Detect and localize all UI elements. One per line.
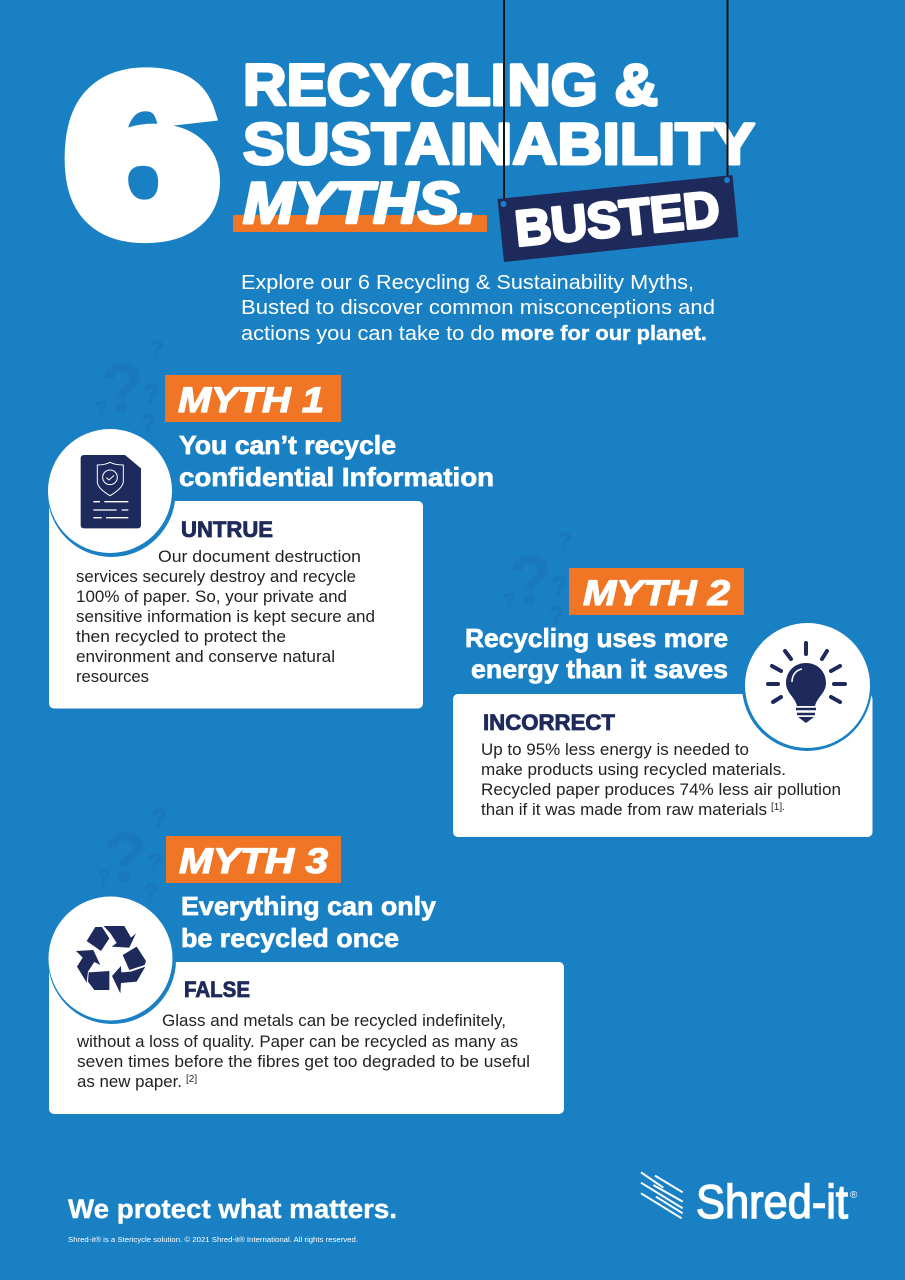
intro text <box>241 271 715 345</box>
question marks: myth 3: ? <box>147 849 162 877</box>
myth 1 heading: You can’t recycle <box>179 430 396 460</box>
myth 2 label <box>569 568 744 615</box>
question marks: myth 3: ? <box>104 818 147 896</box>
question marks: myth 1: ? <box>149 336 164 364</box>
myth 2 body text: [1]. <box>771 802 785 813</box>
big number six: 6 <box>67 33 218 278</box>
tagline: We protect what matters. <box>68 1194 397 1224</box>
myth 2 body text: make products using recycled materials. <box>481 761 786 779</box>
myth 2 body text: Recycled paper produces 74% less air pollution <box>481 781 841 799</box>
myth 2 verdict: INCORRECT <box>483 710 616 735</box>
question marks: myth 1: ? <box>101 349 144 427</box>
myth 3 card <box>49 962 564 1114</box>
myth 2 body text <box>481 741 841 819</box>
question marks: myth 3: ? <box>144 879 159 907</box>
intro text: actions you can take to do more for our planet. <box>241 322 707 345</box>
myth 1 verdict: UNTRUE <box>181 517 273 542</box>
question marks: myth 2: ? <box>549 602 564 630</box>
question marks: myth 2: ? <box>557 528 572 556</box>
panel: myth 2 <box>453 568 872 837</box>
myth 2 heading: energy than it saves <box>471 654 728 684</box>
myth 3 heading <box>181 891 437 953</box>
myth 3 label <box>166 836 341 883</box>
question marks: myth 1 <box>95 336 164 438</box>
myth 1 body text: 100% of paper. So, your private and <box>76 588 347 606</box>
title: SUSTAINABILITY <box>243 112 755 177</box>
question marks: myth 2: ? <box>552 572 567 600</box>
question marks: myth 3 <box>98 805 167 907</box>
myth 1 heading: confidential Information <box>179 462 494 492</box>
intro text: Busted to discover common misconceptions and <box>241 296 715 319</box>
myth 2 body text: Up to 95% less energy is needed to <box>481 741 749 759</box>
icon: light bulb <box>742 621 872 751</box>
myth 3 body text: as new paper. <box>77 1073 182 1091</box>
myth 1 label: MYTH 1 <box>178 381 324 420</box>
myth 3 heading: be recycled once <box>181 923 399 953</box>
myth 3 body text: Glass and metals can be recycled indefinitely, <box>162 1012 506 1030</box>
myth 2 card <box>453 694 872 837</box>
question marks: myth 3: ? <box>98 867 110 889</box>
busted hanging sign <box>498 0 738 262</box>
myth 1 body text: resources <box>76 668 149 686</box>
panel: myth 3 <box>48 836 564 1114</box>
title: RECYCLING & <box>243 53 658 118</box>
title: MYTHS. <box>243 171 476 236</box>
copyright: Shred-it® is a Stericycle solution. © 2021 Shred-it® International. All rights reserved. <box>68 1236 358 1244</box>
question marks: myth 1: ? <box>144 380 159 408</box>
myth 3 body text: without a loss of quality. Paper can be recycled as many as <box>76 1033 518 1051</box>
myth 1 body text: environment and conserve natural <box>76 648 335 666</box>
myth 1 heading <box>179 430 494 492</box>
myth 3 body text: seven times before the fibres get too degraded to be useful <box>77 1053 530 1071</box>
myth 3 label: MYTH 3 <box>179 842 329 881</box>
icon: recycling arrows <box>48 896 176 1024</box>
title <box>233 53 755 236</box>
myth 1 label <box>165 375 341 422</box>
question marks: myth 2: ? <box>503 590 515 612</box>
myth 2 heading: Recycling uses more <box>465 623 728 653</box>
myth 2 label: MYTH 2 <box>583 574 731 613</box>
logo: Shred-it: Shred-it <box>696 1175 848 1228</box>
question marks: myth 2 <box>503 528 572 630</box>
myth 1 body text: Our document destruction <box>158 548 361 566</box>
myth 1 body text: sensitive information is kept secure and <box>76 608 375 626</box>
myth 2 heading <box>465 623 728 684</box>
myth 3 body text <box>76 1012 530 1091</box>
question marks: myth 2: ? <box>509 541 552 619</box>
myth 3 heading: Everything can only <box>181 891 437 921</box>
question marks: myth 1: ? <box>95 398 107 420</box>
myth 3 body text: [2] <box>186 1074 197 1085</box>
panel: myth 1 <box>48 375 494 708</box>
busted hanging sign: BUSTED <box>512 181 722 257</box>
myth 1 card <box>49 501 423 708</box>
myth 2 body text: than if it was made from raw materials <box>481 801 767 819</box>
myth 3 verdict: FALSE <box>184 977 250 1002</box>
icon: secure document <box>48 429 176 557</box>
myth 1 body text: then recycled to protect the <box>76 628 286 646</box>
myth 1 body text: services securely destroy and recycle <box>76 568 356 586</box>
intro text: Explore our 6 Recycling & Sustainability Myths, <box>241 271 694 294</box>
question marks: myth 1: ? <box>141 410 156 438</box>
logo: Shred-it: ® <box>850 1190 858 1201</box>
myth 1 body text <box>76 548 375 686</box>
question marks: myth 3: ? <box>152 805 167 833</box>
